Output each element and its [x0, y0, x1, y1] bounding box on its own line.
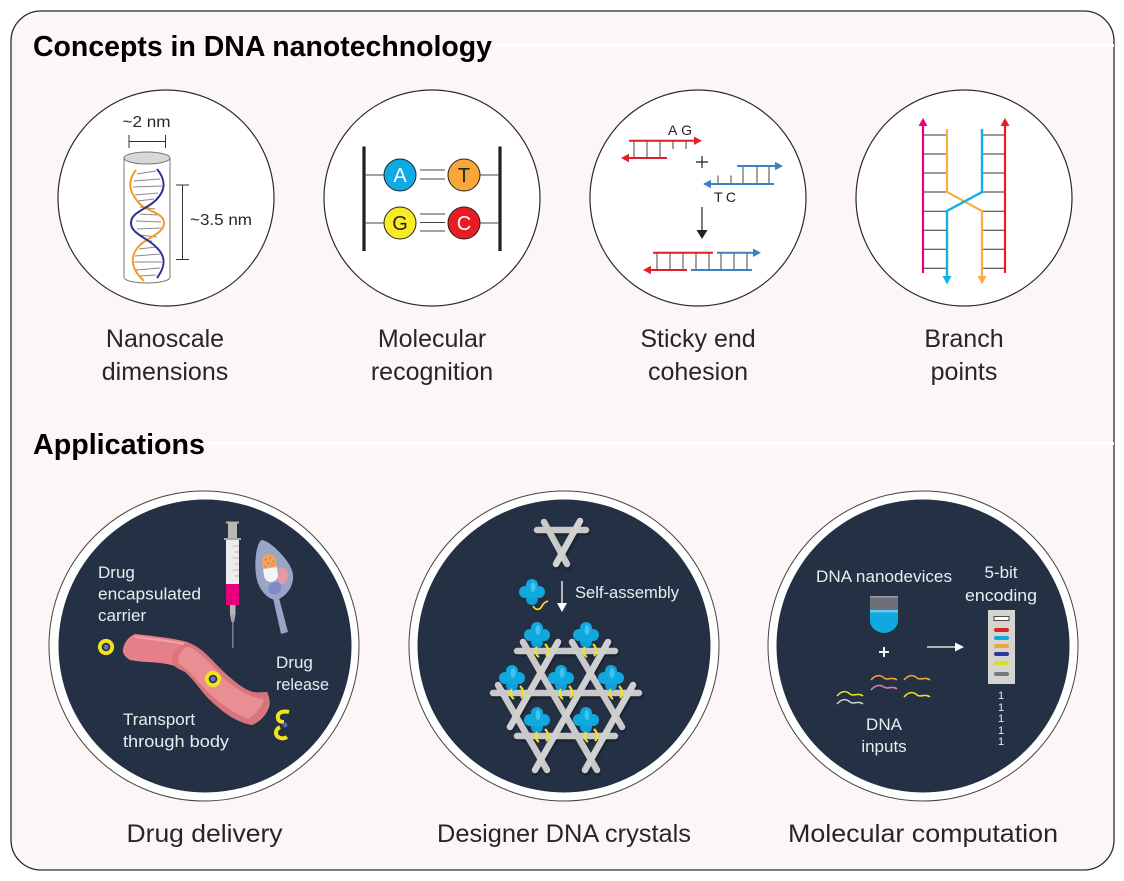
icon: carrier: [100, 641, 112, 653]
icon: syringe: [224, 522, 241, 648]
arrow down: [696, 207, 708, 239]
blue strand: [131, 169, 164, 278]
plus: [879, 647, 889, 657]
DNA tile motif: [537, 521, 586, 564]
heading: concepts: Concepts in DNA nanotechnology: [33, 31, 492, 63]
yellow linkers: [511, 644, 622, 742]
rungs: [634, 141, 769, 270]
text: DNA inputs: DNA: [866, 715, 902, 734]
cylinder: [124, 158, 170, 283]
orange strand: [947, 129, 986, 284]
base A: A: [393, 165, 407, 187]
binary digits: 1: [998, 702, 1004, 714]
icon: test tube: [870, 596, 898, 633]
bonds: [364, 170, 500, 231]
backbones: [364, 146, 500, 251]
arrowheads: [621, 136, 702, 274]
width label: ~2 nm: [122, 114, 170, 131]
label: sticky end cohesion: cohesion: [648, 358, 748, 386]
binary digits: [998, 690, 1004, 748]
AG label: AG: [668, 122, 692, 138]
text: DNA nanodevices: DNA nanodevices: [816, 567, 952, 586]
base T: T: [458, 165, 470, 187]
base T: [448, 159, 480, 191]
icon: carrier in vessel: [207, 673, 219, 685]
label: drug delivery: Drug delivery: [126, 820, 283, 848]
orange strand: [130, 170, 164, 281]
label: branch points: points: [931, 358, 997, 386]
label: designer DNA crystals: Designer DNA crystals: [437, 820, 691, 848]
icon: protein with linker: [519, 579, 548, 609]
red strands: [625, 141, 713, 270]
crystal lattice: [493, 622, 639, 770]
base-pair rungs: [133, 171, 162, 276]
magenta strand: [918, 118, 928, 273]
binary digits: 1: [998, 713, 1004, 725]
base A: [384, 159, 416, 191]
proteins: [499, 622, 624, 733]
base G: G: [392, 213, 408, 235]
text: drug encapsulated carrier: carrier: [98, 606, 147, 625]
binary digits: 1: [998, 690, 1004, 702]
red strand: [1000, 118, 1010, 273]
heading: concepts: [33, 31, 1114, 63]
blood vessel: [123, 634, 270, 725]
text: 5-bit encoding: 5-bit: [984, 563, 1018, 582]
panel: drug delivery: [49, 491, 359, 801]
plus: [696, 156, 708, 168]
label: molecular computation: Molecular computation: [788, 820, 1058, 848]
panel: designer DNA crystals: [409, 491, 719, 801]
base C: [448, 207, 480, 239]
rungs: [923, 135, 1005, 268]
heading: applications: [33, 429, 1114, 461]
blue strands: [691, 166, 778, 270]
label: sticky end cohesion: Sticky end: [640, 325, 756, 353]
label: nanoscale dimensions: dimensions: [102, 358, 228, 386]
panel: molecular recognition: [324, 90, 540, 306]
blue strand: [942, 129, 982, 284]
binary digits: 1: [998, 736, 1004, 748]
arrow to gel: [927, 642, 964, 652]
text: drug release: release: [276, 675, 329, 694]
panel: sticky end cohesion: [590, 90, 806, 306]
panel: nanoscale dimensions: [58, 90, 274, 306]
text: DNA inputs: inputs: [861, 737, 907, 756]
DNA input strands: [837, 676, 930, 704]
label: molecular recognition: recognition: [371, 358, 493, 386]
label: branch points: Branch: [924, 325, 1004, 353]
panel: branch points: [856, 90, 1072, 306]
cylinder top: [124, 152, 170, 164]
panel: molecular computation: [768, 491, 1078, 801]
icon: spoon with pills: [255, 540, 293, 634]
base G: [384, 207, 416, 239]
text: drug encapsulated carrier: encapsulated: [98, 584, 201, 604]
text: 5-bit encoding: encoding: [965, 586, 1037, 605]
binary digits: 1: [998, 725, 1004, 737]
base C: C: [457, 213, 471, 235]
height label: ~3.5 nm: [190, 212, 252, 229]
icon: opened carrier: [276, 711, 289, 738]
arrow: self-assembly: [557, 581, 567, 612]
text: drug release: Drug: [276, 653, 313, 672]
heading: applications: Applications: [33, 429, 205, 461]
width bracket: [129, 135, 166, 148]
text: transport through body: Transport: [123, 710, 195, 729]
text: drug encapsulated carrier: Drug: [98, 563, 135, 582]
text: self-assembly: Self-assembly: [575, 583, 679, 602]
height bracket: [176, 185, 189, 260]
gel strip: [988, 610, 1015, 684]
label: molecular recognition: Molecular: [378, 325, 486, 353]
label: nanoscale dimensions: Nanoscale: [106, 325, 224, 353]
TC label: TC: [714, 189, 736, 205]
text: transport through body: through body: [123, 732, 230, 751]
